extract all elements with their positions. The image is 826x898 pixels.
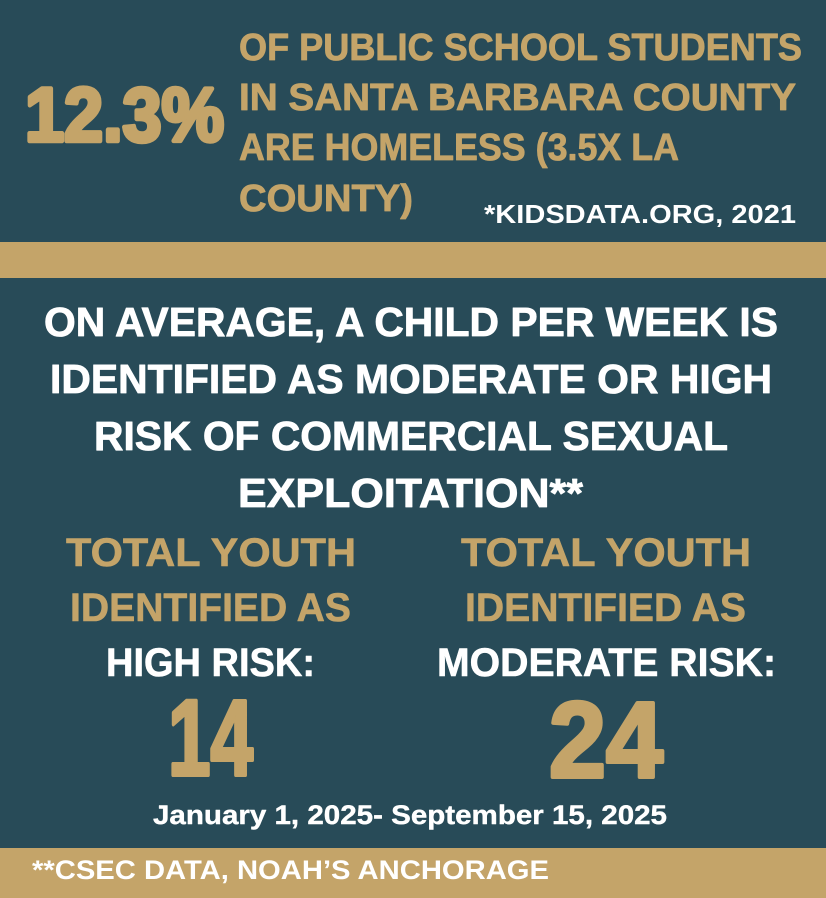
label: total youth identified as high risk bbox=[66, 531, 356, 685]
number: 14: 14 bbox=[168, 677, 253, 798]
heading: child per week statement: RISK OF COMMERCIAL SEXUAL bbox=[94, 413, 728, 459]
label: total youth identified as high risk: IDENTIFIED AS bbox=[70, 586, 351, 630]
panel: moderate risk youth bbox=[437, 531, 776, 800]
text block: homeless students statement: ARE HOMELESS (3.5X LA bbox=[239, 127, 679, 169]
label: total youth identified as moderate risk: MODERATE RISK: bbox=[437, 641, 776, 685]
heading: child per week statement: EXPLOITATION** bbox=[238, 470, 583, 516]
heading: child per week statement bbox=[44, 299, 778, 516]
label: total youth identified as moderate risk: TOTAL YOUTH bbox=[461, 531, 751, 575]
date range: January 1, 2025- September 15, 2025 bbox=[153, 800, 667, 830]
text block: homeless students statement: IN SANTA BARBARA COUNTY bbox=[239, 77, 796, 119]
number: 24: 24 bbox=[549, 679, 663, 800]
text block: homeless students statement: COUNTY) bbox=[239, 178, 413, 220]
panel: high risk youth bbox=[66, 531, 356, 798]
label: total youth identified as high risk: HIGH RISK: bbox=[106, 641, 315, 685]
statistic: 12.3%: 12.3% bbox=[25, 73, 224, 158]
divider band bbox=[0, 242, 826, 278]
source note: kidsdata.org: *KIDSDATA.ORG, 2021 bbox=[484, 199, 796, 229]
footer band bbox=[0, 848, 826, 898]
source note: CSEC data: **CSEC DATA, NOAH’S ANCHORAGE bbox=[32, 855, 549, 885]
heading: child per week statement: ON AVERAGE, A CHILD PER WEEK IS bbox=[44, 299, 778, 345]
text block: homeless students statement: OF PUBLIC SCHOOL STUDENTS bbox=[239, 27, 802, 69]
label: total youth identified as high risk: TOTAL YOUTH bbox=[66, 531, 356, 575]
label: total youth identified as moderate risk: IDENTIFIED AS bbox=[465, 586, 746, 630]
label: total youth identified as moderate risk bbox=[437, 531, 776, 685]
heading: child per week statement: IDENTIFIED AS MODERATE OR HIGH bbox=[50, 356, 772, 402]
text block: homeless students statement bbox=[239, 27, 802, 220]
